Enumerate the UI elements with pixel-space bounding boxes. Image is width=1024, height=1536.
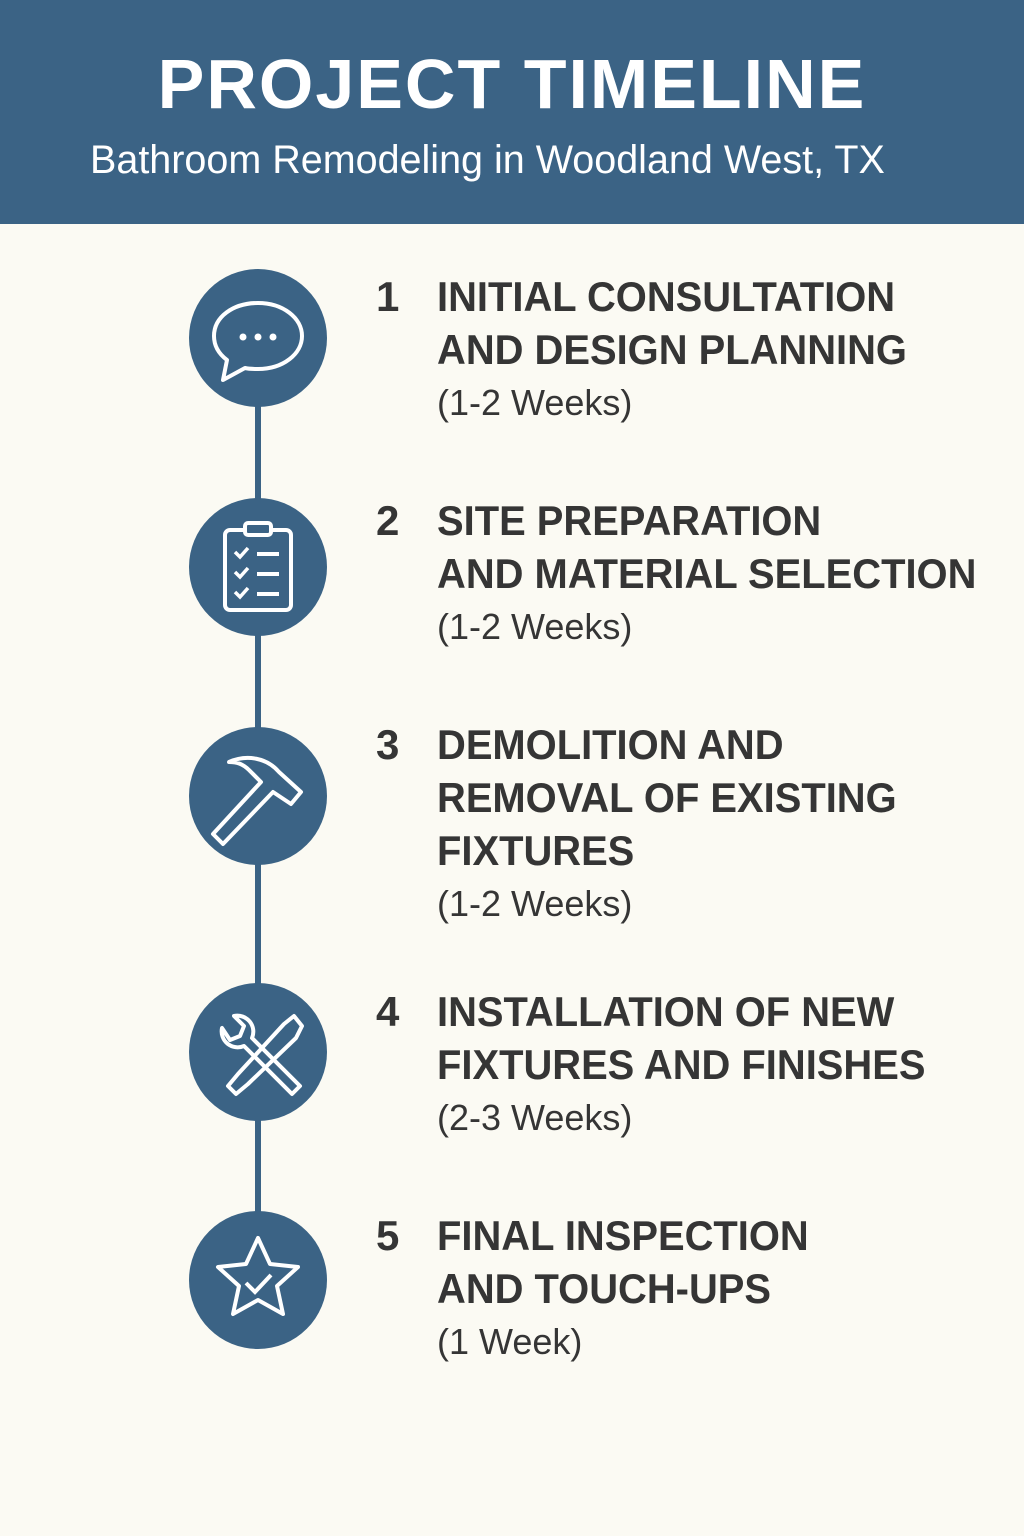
text: FIXTURES [437,827,634,874]
text: DEMOLITION AND [437,721,784,768]
text: 1 [376,273,399,320]
icon: star check [189,1211,327,1349]
text: SITE PREPARATION [437,497,821,544]
step 4 [376,988,925,1138]
step 1 [376,273,907,423]
text: (2-3 Weeks) [437,1097,632,1138]
text: INITIAL CONSULTATION [437,273,895,320]
text: 5 [376,1212,399,1259]
title: PROJECT TIMELINE [158,45,866,123]
text: (1-2 Weeks) [437,883,632,924]
text: AND DESIGN PLANNING [437,326,907,373]
step 3 [376,721,897,924]
icon: clipboard checklist [189,498,327,636]
text: FINAL INSPECTION [437,1212,809,1259]
icon: chat bubble [189,269,327,407]
step 5 [376,1212,809,1362]
text: AND TOUCH-UPS [437,1265,771,1312]
icon: hammer [189,727,327,865]
text: (1 Week) [437,1321,582,1362]
text: AND MATERIAL SELECTION [437,550,976,597]
text: 4 [376,988,399,1035]
text: (1-2 Weeks) [437,606,632,647]
header banner [0,0,1024,224]
text: FIXTURES AND FINISHES [437,1041,925,1088]
text: 3 [376,721,399,768]
subtitle: Bathroom Remodeling in Woodland West, TX [90,138,885,182]
text: (1-2 Weeks) [437,382,632,423]
text: 2 [376,497,399,544]
icon: wrench and screwdriver [189,983,327,1121]
step 2 [376,497,976,647]
text: INSTALLATION OF NEW [437,988,894,1035]
text: REMOVAL OF EXISTING [437,774,897,821]
